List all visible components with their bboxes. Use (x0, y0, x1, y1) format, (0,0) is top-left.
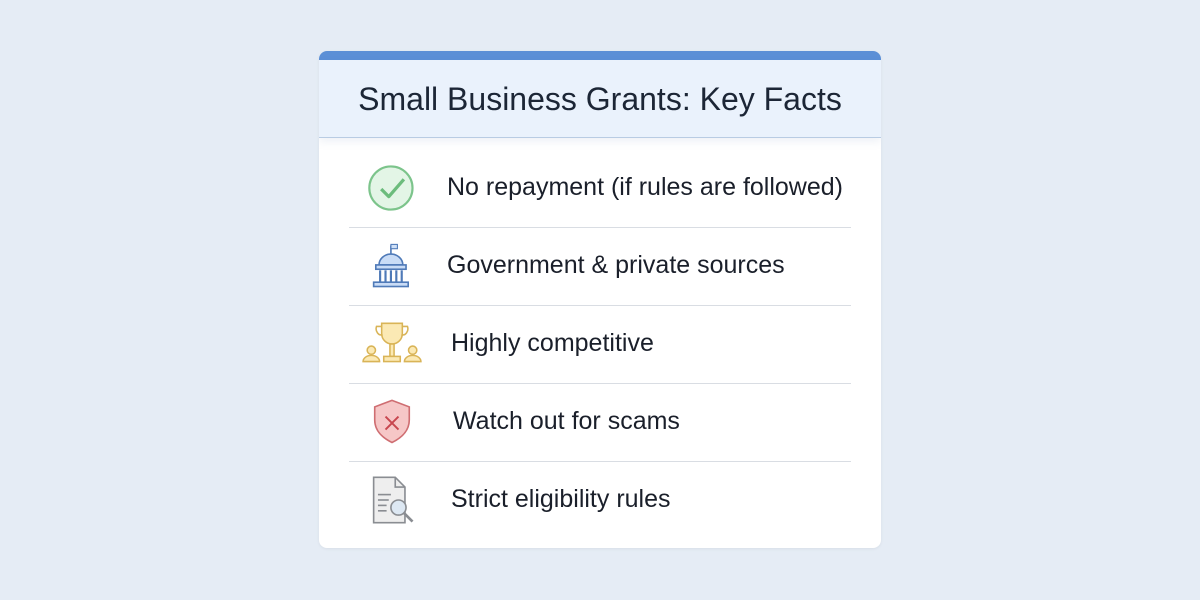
text: Government & private sources (447, 251, 785, 279)
text: Strict eligibility rules (451, 485, 671, 513)
row: sources (372, 244, 785, 288)
header (319, 60, 881, 138)
row: eligibility (372, 476, 671, 524)
text: Highly competitive (451, 329, 654, 357)
card (319, 51, 881, 548)
icon: document search (372, 476, 414, 524)
text: No repayment (if rules are followed) (447, 173, 843, 201)
icon: building (372, 244, 409, 288)
icon: shield (374, 400, 410, 444)
row: no repayment (368, 165, 843, 211)
row: competitive (362, 322, 654, 362)
text: Watch out for scams (453, 407, 680, 435)
row: scams (374, 400, 680, 444)
icon: trophy (362, 322, 422, 362)
title: Small Business Grants: Key Facts (358, 81, 842, 117)
icon: check (368, 165, 414, 211)
